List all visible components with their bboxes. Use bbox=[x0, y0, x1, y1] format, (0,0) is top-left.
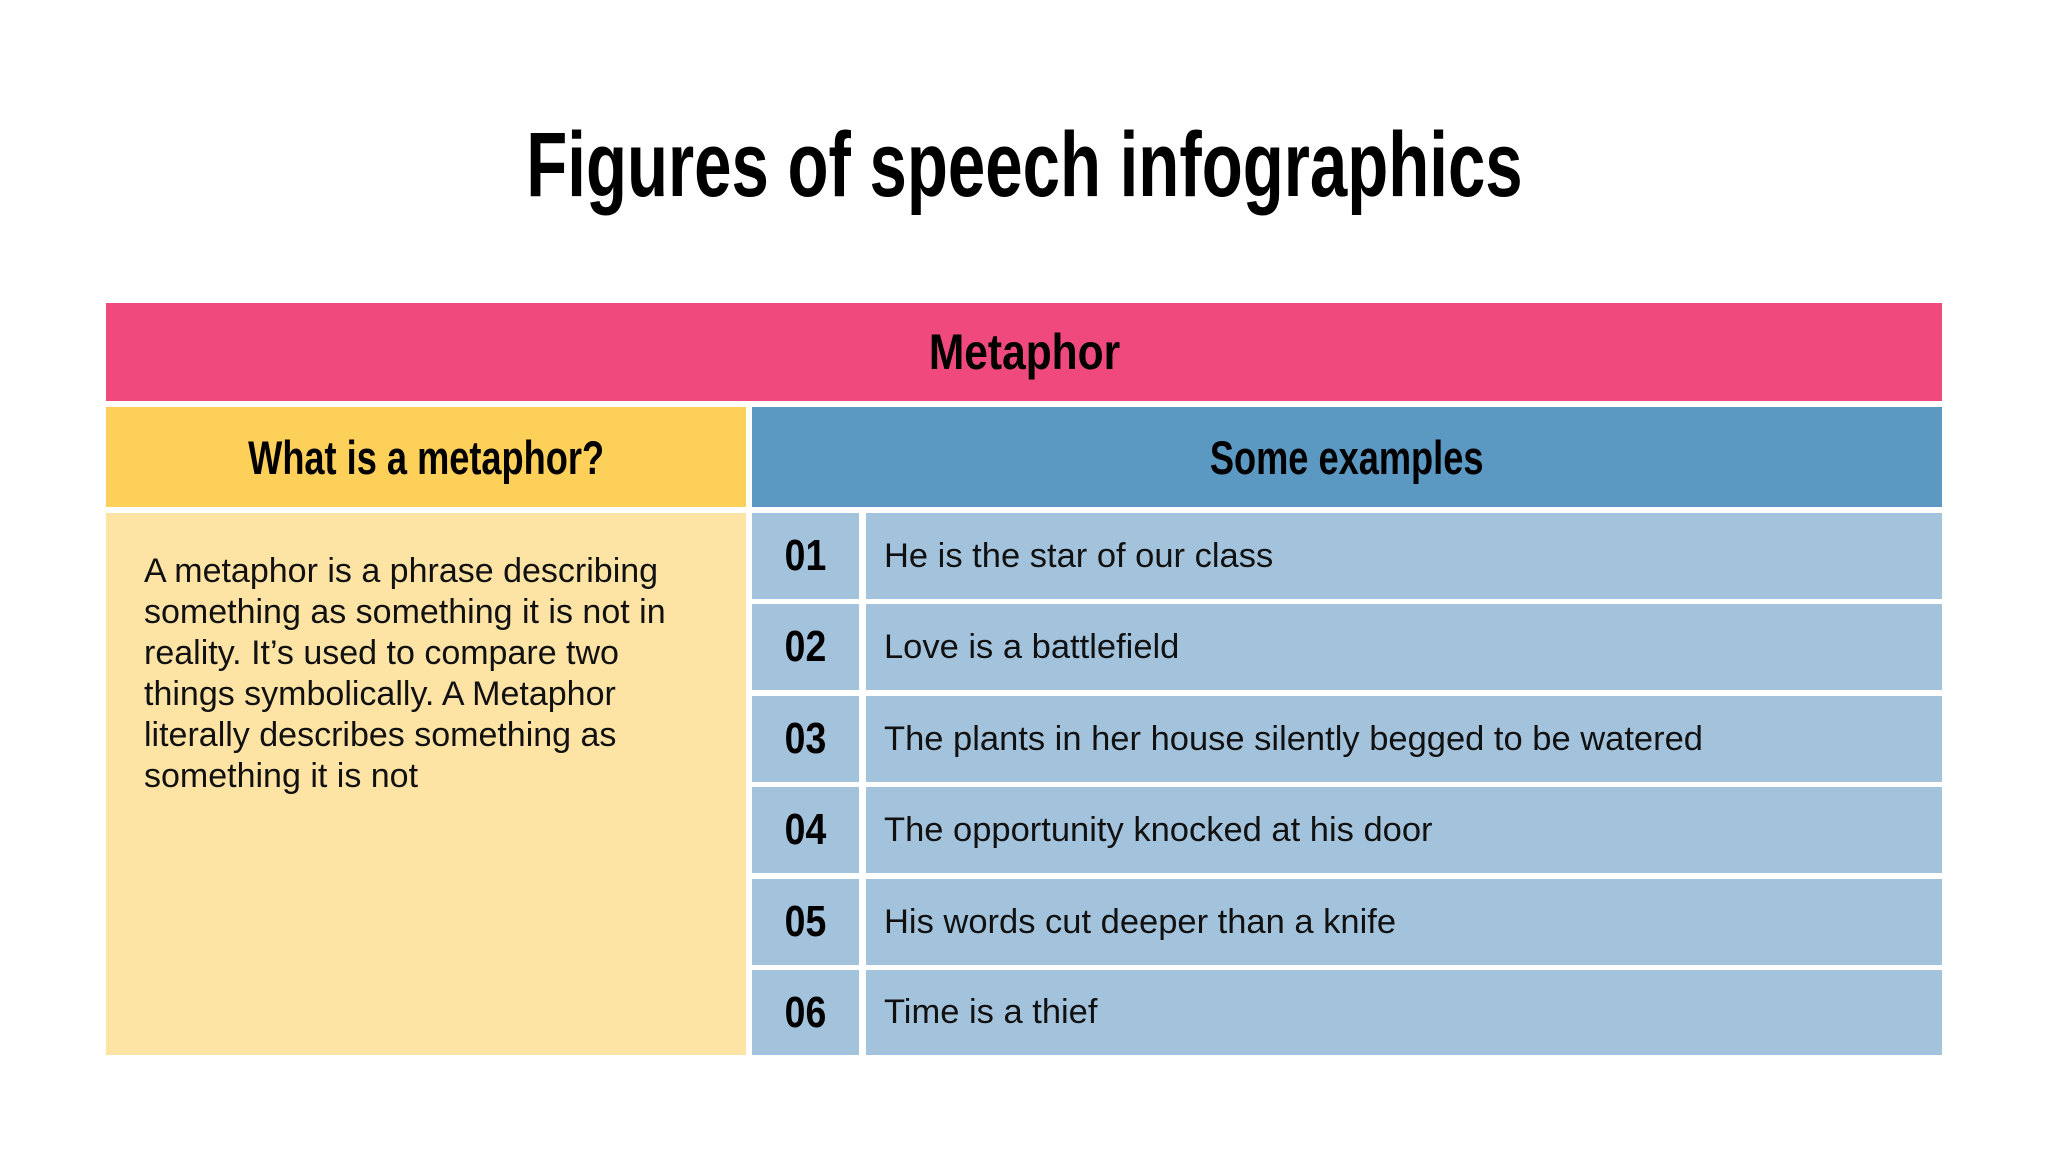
header: Some examples: Some examples bbox=[1210, 430, 1484, 484]
header: What is a metaphor bbox=[106, 407, 746, 507]
example 06 bbox=[752, 970, 859, 1055]
panel: definition: A metaphor is a phrase describing something as something it is not in reality. It’s used to compare two things symbolically. A Metaphor literally describes something as something it is not bbox=[144, 552, 666, 795]
example 02: 02 bbox=[785, 622, 826, 671]
example 01 bbox=[752, 513, 859, 599]
example 06: 06 bbox=[785, 988, 826, 1036]
example 05 bbox=[752, 879, 859, 965]
example 01: 01 bbox=[785, 531, 826, 580]
text: He is the star of our class bbox=[884, 536, 1273, 574]
example 02 bbox=[752, 604, 859, 690]
example 04 bbox=[752, 787, 859, 873]
panel: definition bbox=[106, 513, 746, 1055]
text: Love is a battlefield bbox=[884, 628, 1179, 666]
example 03 bbox=[752, 696, 859, 782]
example 04: 04 bbox=[785, 805, 826, 854]
example 05: 05 bbox=[785, 897, 826, 946]
header: Some examples bbox=[752, 407, 1942, 507]
header: Metaphor: Metaphor bbox=[928, 324, 1120, 380]
header: What is a metaphor: What is a metaphor? bbox=[248, 430, 604, 484]
example 03: 03 bbox=[785, 714, 826, 763]
text: The opportunity knocked at his door bbox=[884, 810, 1432, 848]
text: His words cut deeper than a knife bbox=[884, 902, 1396, 940]
text: The plants in her house silently begged to be watered bbox=[884, 720, 1703, 758]
text: Time is a thief bbox=[884, 993, 1097, 1031]
title: Figures of speech infographics bbox=[526, 114, 1522, 216]
header: Metaphor bbox=[106, 303, 1942, 401]
